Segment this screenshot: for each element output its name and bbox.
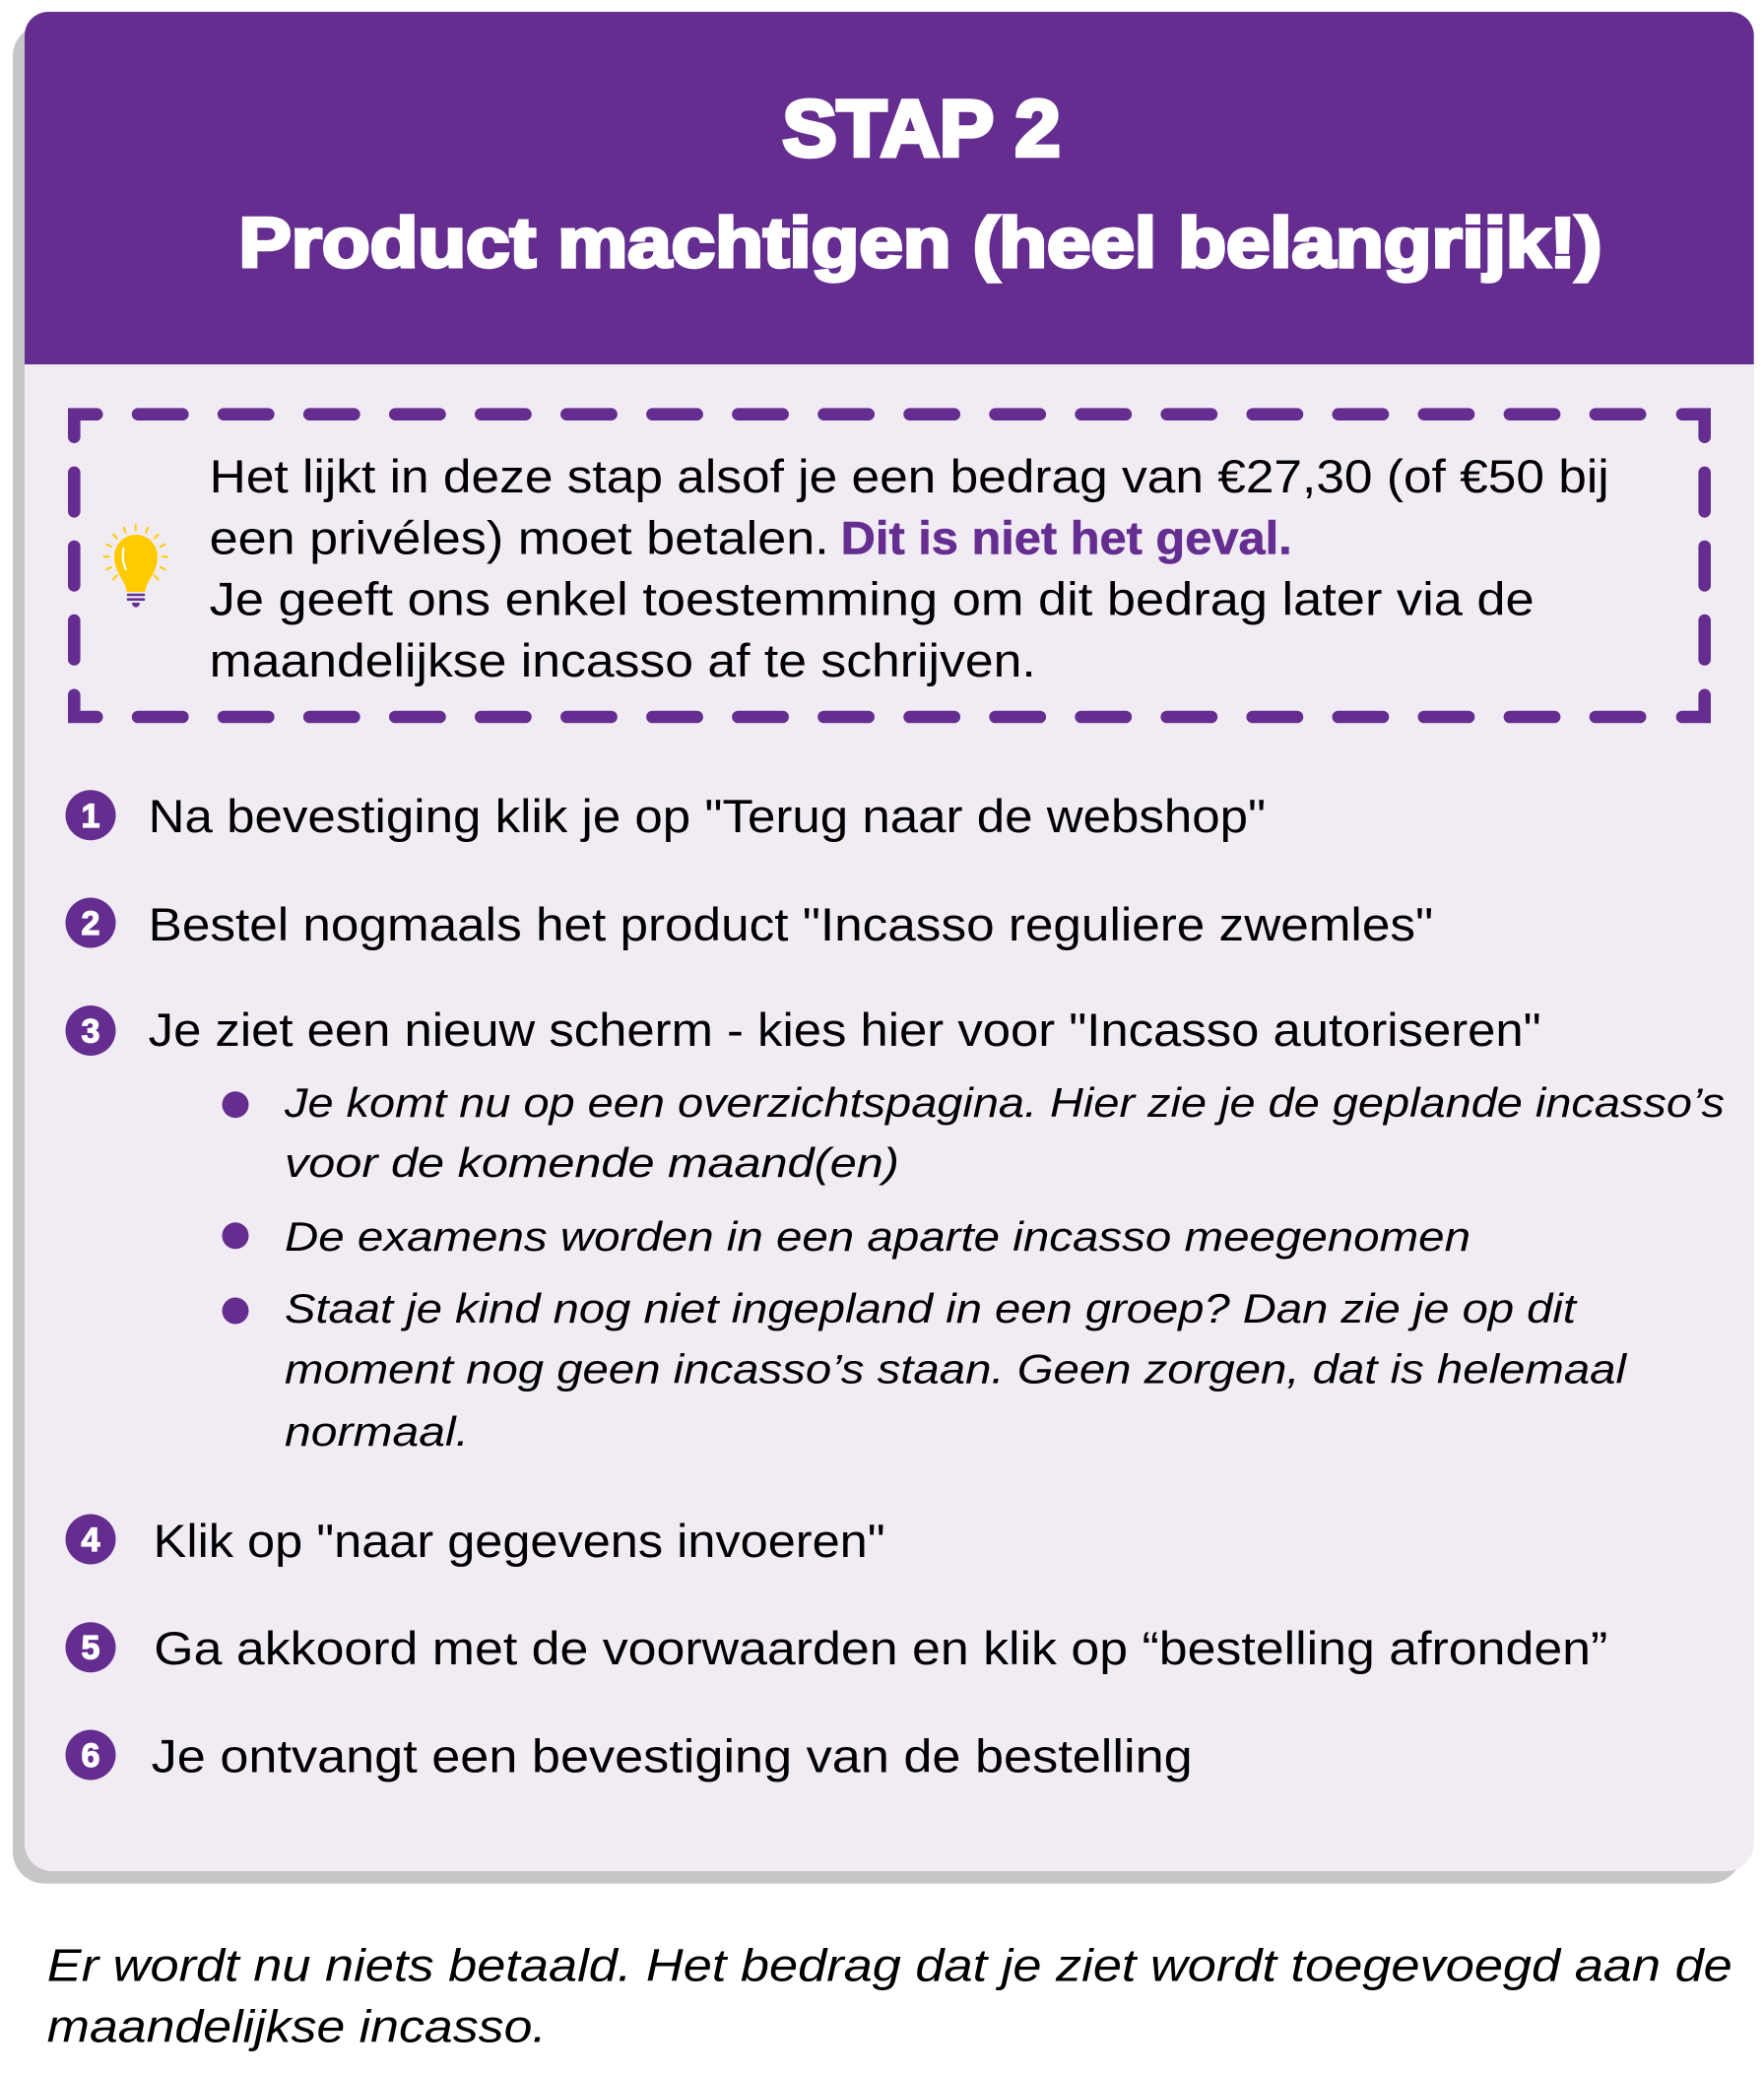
- heading: STAP 2: STAP 2: [782, 85, 1060, 173]
- step 5: Ga akkoord met de voorwaarden en klik op “bestelling afronden”: [154, 1622, 1607, 1674]
- step 2: 2: [82, 905, 99, 942]
- step 6: 6: [82, 1737, 99, 1775]
- sub-bullet: niet ingepland: moment nog geen incasso’s staan. Geen zorgen, dat is helemaal: [285, 1346, 1628, 1393]
- heading: Product machtigen: Product machtigen (heel belangrijk!): [238, 205, 1601, 283]
- sub-bullet: overzichtspagina: Je komt nu op een overzichtspagina. Hier zie je de geplande incasso’s: [284, 1079, 1725, 1126]
- sub-bullet: niet ingepland: [223, 1285, 1628, 1455]
- step 5: 5: [82, 1630, 99, 1667]
- notice text: een privéles) moet betalen.: [210, 511, 829, 563]
- step 2: Bestel nogmaals het product "Incasso reguliere zwemles": [149, 898, 1433, 950]
- sub-bullet: niet ingepland: normaal.: [285, 1408, 469, 1455]
- step 3: 3: [82, 1012, 99, 1050]
- callout: dashed notice box: [74, 415, 1705, 717]
- step 6: Je ontvangt een bevestiging van de bestelling: [152, 1729, 1193, 1782]
- sub-bullet: examens: De examens worden in een aparte incasso meegenomen: [285, 1213, 1470, 1260]
- notice text: Het lijkt in deze stap alsof je een bedrag van €27,30 (of €50 bij: [210, 450, 1609, 502]
- header band: [25, 12, 1754, 364]
- notice text: maandelijkse incasso af te schrijven.: [210, 634, 1036, 686]
- footer note: maandelijkse incasso.: [47, 2000, 547, 2051]
- step 1: Na bevestiging klik je op "Terug naar de webshop": [149, 790, 1266, 842]
- sub-bullet: niet ingepland: Staat je kind nog niet ingepland in een groep? Dan zie je op dit: [285, 1285, 1579, 1331]
- icon: light bulb: [103, 525, 167, 608]
- step 4: Klik op "naar gegevens invoeren": [154, 1515, 885, 1567]
- sub-bullet: overzichtspagina: voor de komende maand(en): [285, 1139, 899, 1186]
- step 4: 4: [82, 1522, 100, 1559]
- step 1: 1: [82, 798, 99, 835]
- footer note: Er wordt nu niets betaald. Het bedrag dat je ziet wordt toegevoegd aan de: [47, 1940, 1732, 1991]
- notice text: Dit is niet het geval.: [841, 511, 1292, 563]
- notice text: [210, 450, 1609, 686]
- step 3: Je ziet een nieuw scherm - kies hier voor "Incasso autoriseren": [149, 1004, 1541, 1056]
- notice text: Je geeft ons enkel toestemming om dit bedrag later via de: [210, 572, 1535, 624]
- sub-bullet: overzichtspagina: [223, 1079, 1725, 1186]
- dashed border: [74, 415, 1705, 717]
- footer note: [47, 1940, 1732, 2051]
